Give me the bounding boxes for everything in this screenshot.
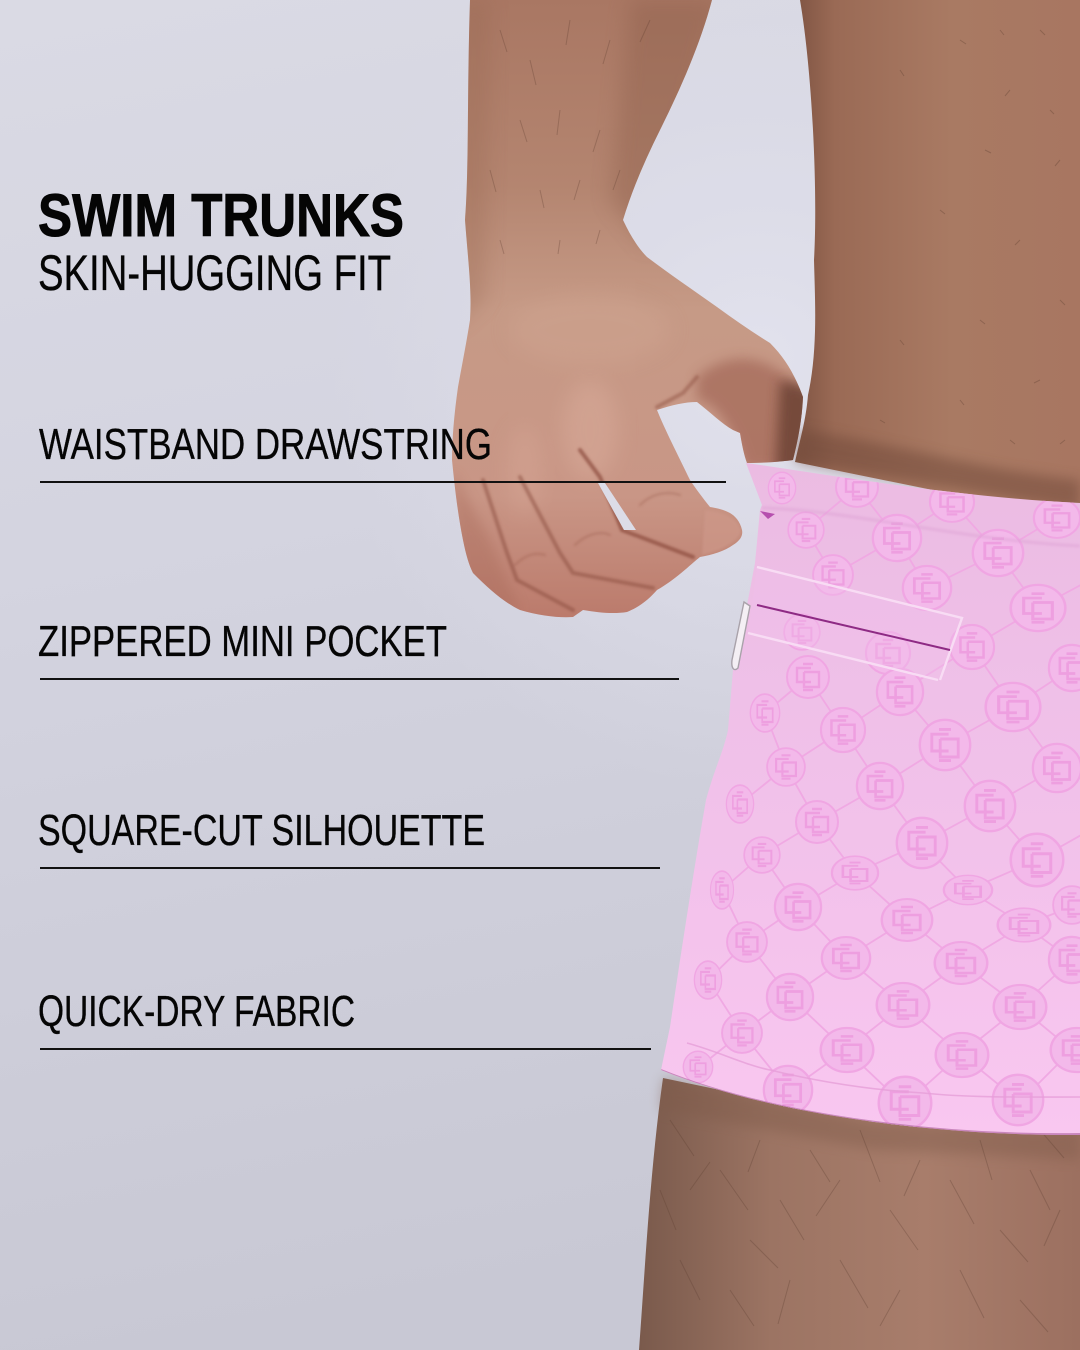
label: square-cut silhouette: SQUARE-CUT SILHOUETTE xyxy=(38,806,485,855)
zippered mini pocket xyxy=(732,567,962,680)
subtitle: SKIN-HUGGING FIT xyxy=(38,245,391,301)
shorts xyxy=(661,463,1080,1135)
title: SWIM TRUNKS xyxy=(38,182,404,249)
hand shading xyxy=(450,0,830,612)
arm and hand xyxy=(450,0,830,617)
middle / ring gap shadow xyxy=(520,477,653,588)
torso xyxy=(795,0,1080,520)
ring / pinky gap shadow xyxy=(483,480,573,610)
thumb web crease xyxy=(657,377,697,407)
arm hair xyxy=(490,20,650,254)
label: waistband drawstring: WAISTBAND DRAWSTRING xyxy=(39,420,492,469)
thigh xyxy=(639,1078,1080,1350)
monogram pattern xyxy=(661,467,1080,1134)
leg hair xyxy=(660,1120,1064,1332)
label: zippered mini pocket: ZIPPERED MINI POCKET xyxy=(38,617,447,666)
knuckle creases xyxy=(515,493,680,565)
label: quick-dry fabric: QUICK-DRY FABRIC xyxy=(38,987,355,1036)
finger gap xyxy=(598,483,636,530)
index / middle gap shadow xyxy=(580,450,693,557)
